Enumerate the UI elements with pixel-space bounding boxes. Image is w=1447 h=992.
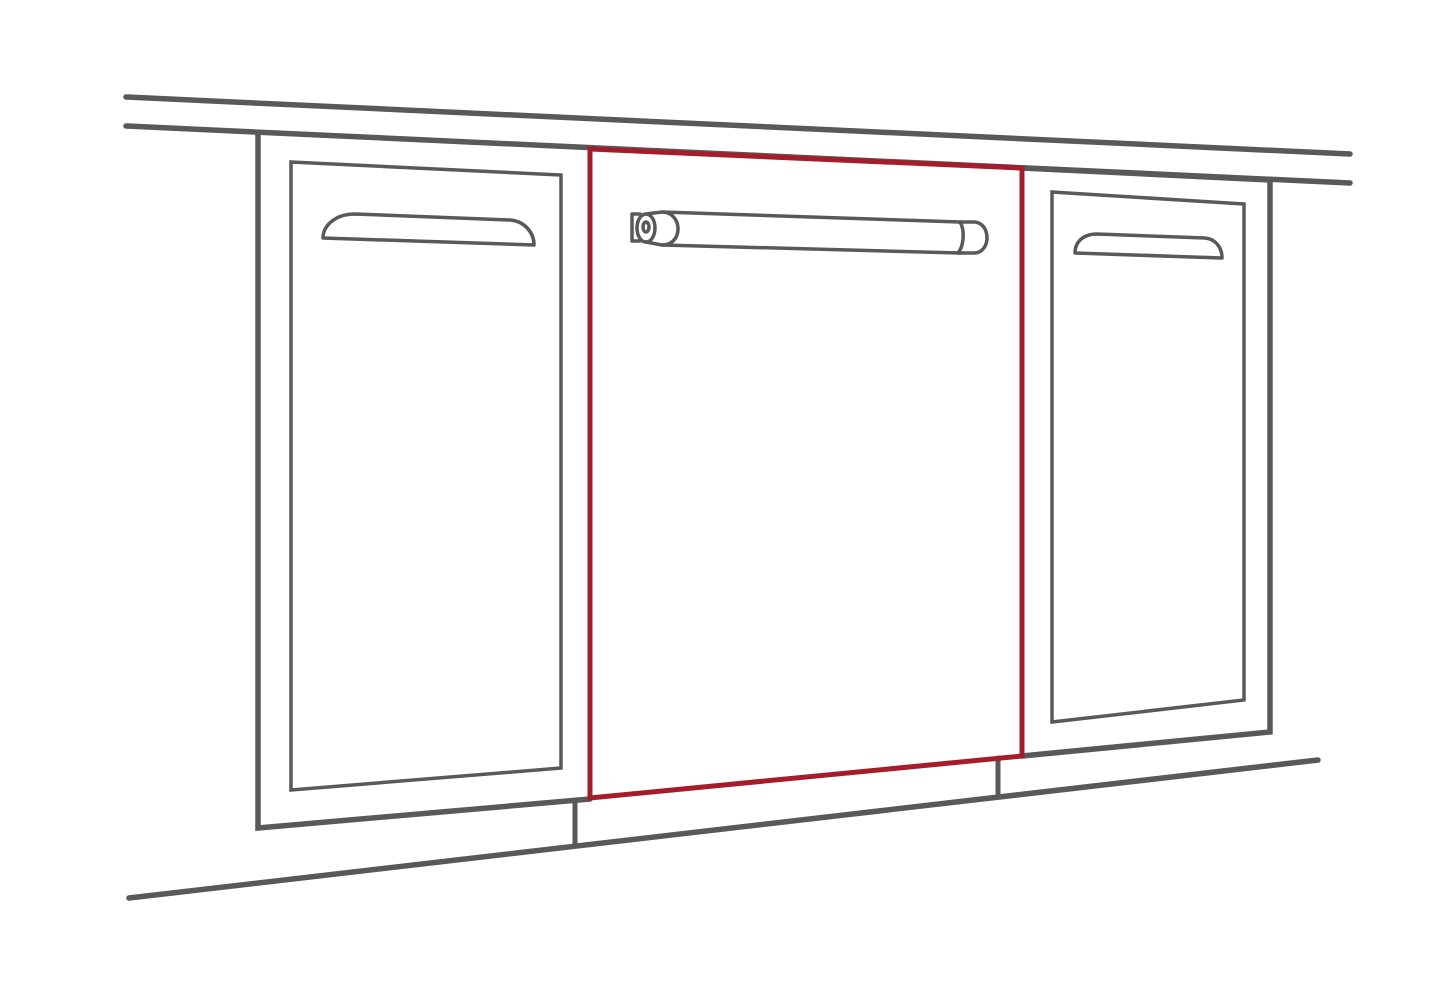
left cabinet <box>258 133 590 845</box>
right cabinet <box>998 168 1270 797</box>
dishwasher panel outline (red) <box>590 149 1022 798</box>
floor line <box>129 760 1318 898</box>
dishwasher handle <box>632 212 987 253</box>
countertop <box>126 97 1350 183</box>
right cabinet handle <box>1075 234 1222 258</box>
left cabinet handle <box>323 214 534 245</box>
